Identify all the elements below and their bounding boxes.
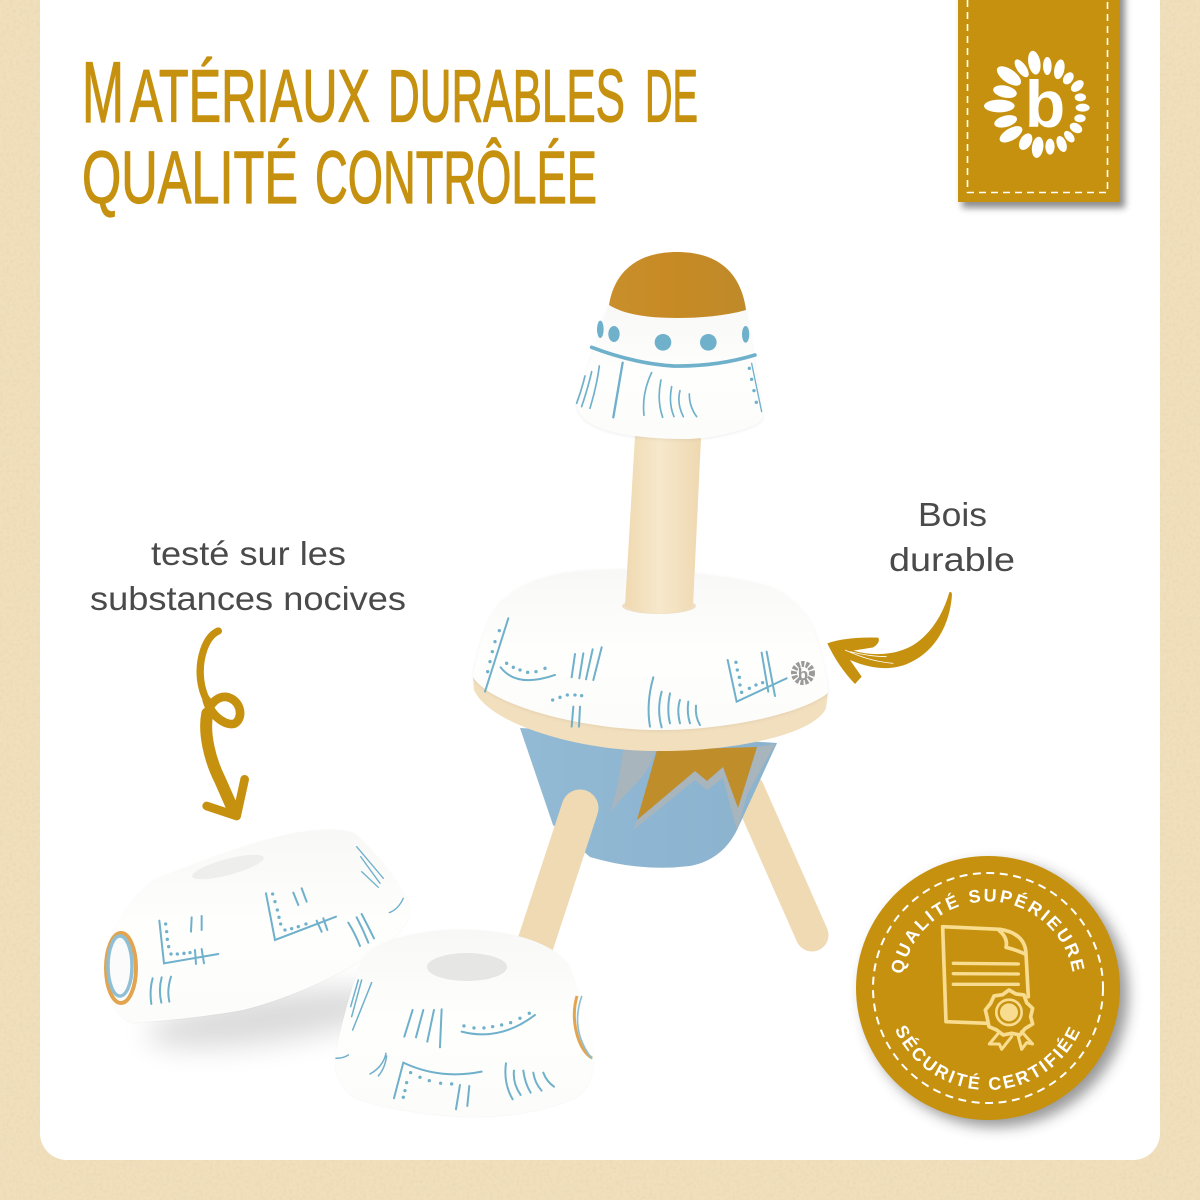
ring pattern xyxy=(485,618,787,727)
arrow: curly arrow to stacked pieces xyxy=(200,631,245,816)
label: testé sur les substances nocives: substances nocives xyxy=(90,580,406,617)
title: ATÉRIAUX xyxy=(130,54,370,138)
top cone xyxy=(577,252,763,439)
label: bois durable: Bois xyxy=(918,496,987,533)
logo letter: b xyxy=(1025,67,1065,141)
blue pot with mountain decor xyxy=(520,728,777,868)
fallen left ring xyxy=(105,829,410,1023)
icon: grey logo on ring: b xyxy=(798,665,808,684)
dome cap xyxy=(609,252,746,318)
shadow under fallen ring xyxy=(143,977,397,1059)
front right ring xyxy=(335,929,593,1117)
icon: certificate with rosette xyxy=(943,927,1033,1049)
title: QUALITÉ xyxy=(82,136,298,219)
title: M xyxy=(82,45,124,141)
badge text bottom: SÉCURITÉ CERTIFIÉE xyxy=(896,1026,1080,1090)
icon: grey logo on ring xyxy=(794,664,812,684)
orange and blue circle xyxy=(106,933,136,1003)
label: testé sur les substances nocives xyxy=(90,535,406,617)
title: DURABLES xyxy=(388,54,625,138)
cone pattern xyxy=(577,321,762,417)
title: DE xyxy=(645,54,698,138)
fallen ring pattern xyxy=(151,847,403,1004)
product: wooden stacking toy xyxy=(105,252,828,1117)
left leg xyxy=(535,808,580,945)
center dowel xyxy=(625,436,701,614)
brand tag with logo xyxy=(958,0,1125,208)
wood rim of big ring xyxy=(473,677,828,751)
label: testé sur les substances nocives: testé sur les xyxy=(151,535,346,572)
big white ring xyxy=(473,569,828,730)
badge text top: QUALITÉ SUPÉRIEURE xyxy=(892,888,1084,973)
partial ring decor xyxy=(574,996,592,1058)
label: bois durable xyxy=(889,496,1015,578)
label: bois durable: durable xyxy=(889,541,1015,578)
right leg xyxy=(748,790,812,935)
arrow: swoosh to the wood xyxy=(827,592,952,684)
title xyxy=(82,45,698,219)
front ring pattern xyxy=(336,980,592,1109)
badge: quality seal xyxy=(855,854,1137,1136)
icon: sunflower logo xyxy=(984,50,1090,159)
hole in big ring xyxy=(622,598,696,614)
title: CONTRÔLÉE xyxy=(315,136,597,219)
